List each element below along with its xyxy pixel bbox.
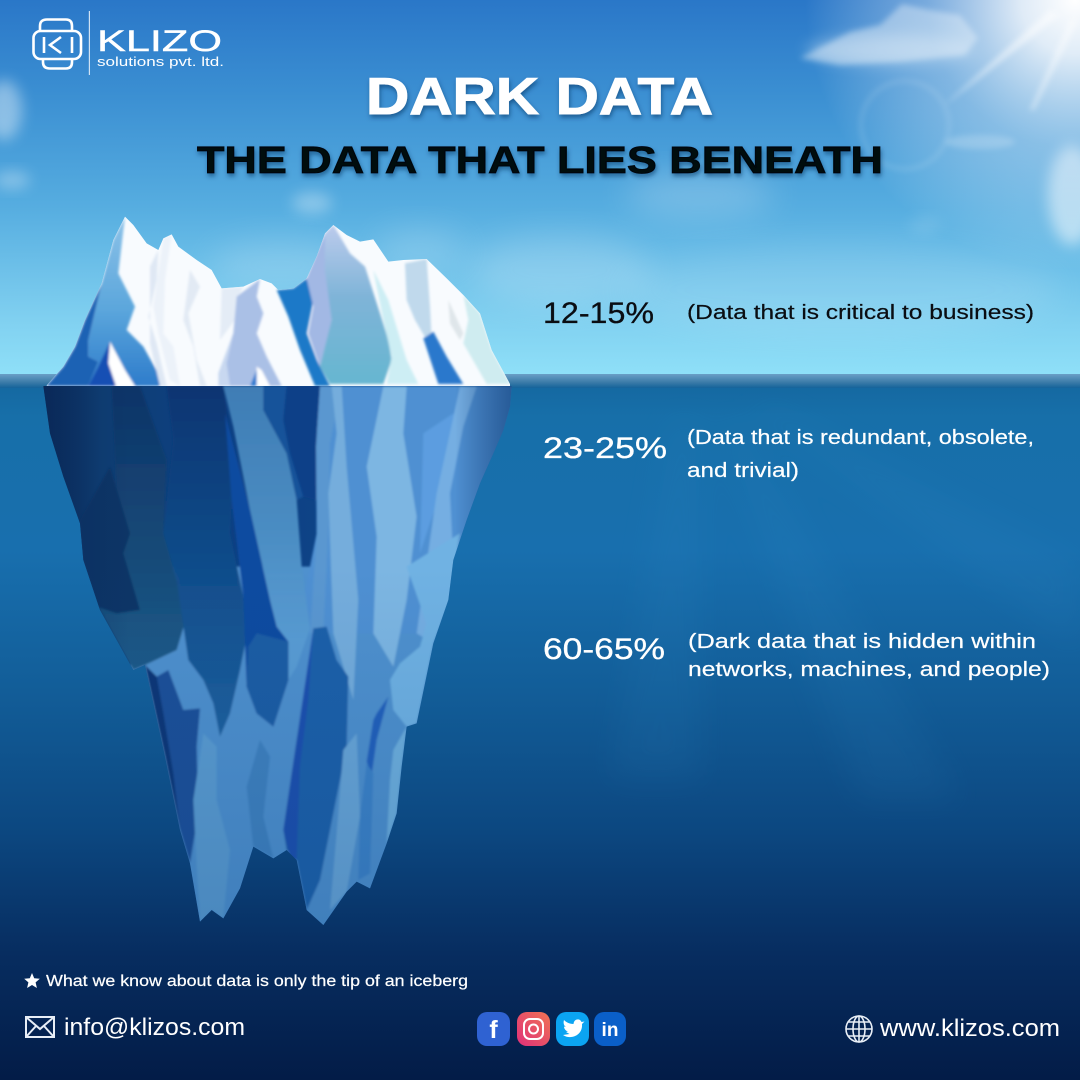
underwater light rays xyxy=(610,400,1080,800)
stat: 60-65% xyxy=(543,631,1050,681)
icon: instagram xyxy=(517,1012,550,1046)
icon: facebook: f xyxy=(489,1016,498,1044)
icon: twitter xyxy=(556,1012,589,1046)
stat: 23-25% xyxy=(543,427,1034,482)
stat: 60-65%: 60-65% xyxy=(543,633,665,666)
logo wordmark: KLIZO xyxy=(97,25,222,58)
clouds in sky xyxy=(0,4,1080,335)
stat: 23-25%: 23-25% xyxy=(543,432,667,465)
iceberg illustration xyxy=(30,213,530,940)
icon: envelope xyxy=(26,1017,54,1037)
stat: 12-15% xyxy=(543,297,1034,330)
social icons xyxy=(477,1012,626,1046)
stat: 23-25%: and trivial) xyxy=(687,460,799,482)
icon: linkedin xyxy=(594,1012,626,1046)
contact: website: www.klizos.com xyxy=(879,1015,1060,1042)
ocean background xyxy=(0,374,1080,1080)
logo divider xyxy=(89,11,90,75)
icon: globe xyxy=(846,1016,872,1042)
logo icon xyxy=(34,20,81,68)
iceberg tip above water xyxy=(43,213,513,387)
subtitle: THE DATA THAT LIES BENEATH xyxy=(197,140,883,182)
sun glare xyxy=(805,0,1080,270)
logo xyxy=(34,11,224,75)
contact: email: info@klizos.com xyxy=(64,1014,245,1041)
stat: 12-15%: 12-15% xyxy=(543,297,654,330)
sky background xyxy=(0,0,1080,376)
footnote: What we know about data is only the tip of an iceberg xyxy=(46,973,468,990)
icon: facebook xyxy=(477,1012,510,1046)
stat: 60-65%: networks, machines, and people) xyxy=(688,659,1050,681)
icon: linkedin: in xyxy=(602,1020,618,1041)
title: DARK DATA xyxy=(366,68,713,126)
stat: 60-65%: (Dark data that is hidden within xyxy=(688,631,1036,653)
stat: 23-25%: (Data that is redundant, obsolete, xyxy=(687,427,1034,449)
stat: 12-15%: (Data that is critical to business) xyxy=(687,302,1034,324)
iceberg underwater part xyxy=(30,385,530,940)
logo tagline: solutions pvt. ltd. xyxy=(97,54,224,69)
icon: star xyxy=(24,973,40,988)
